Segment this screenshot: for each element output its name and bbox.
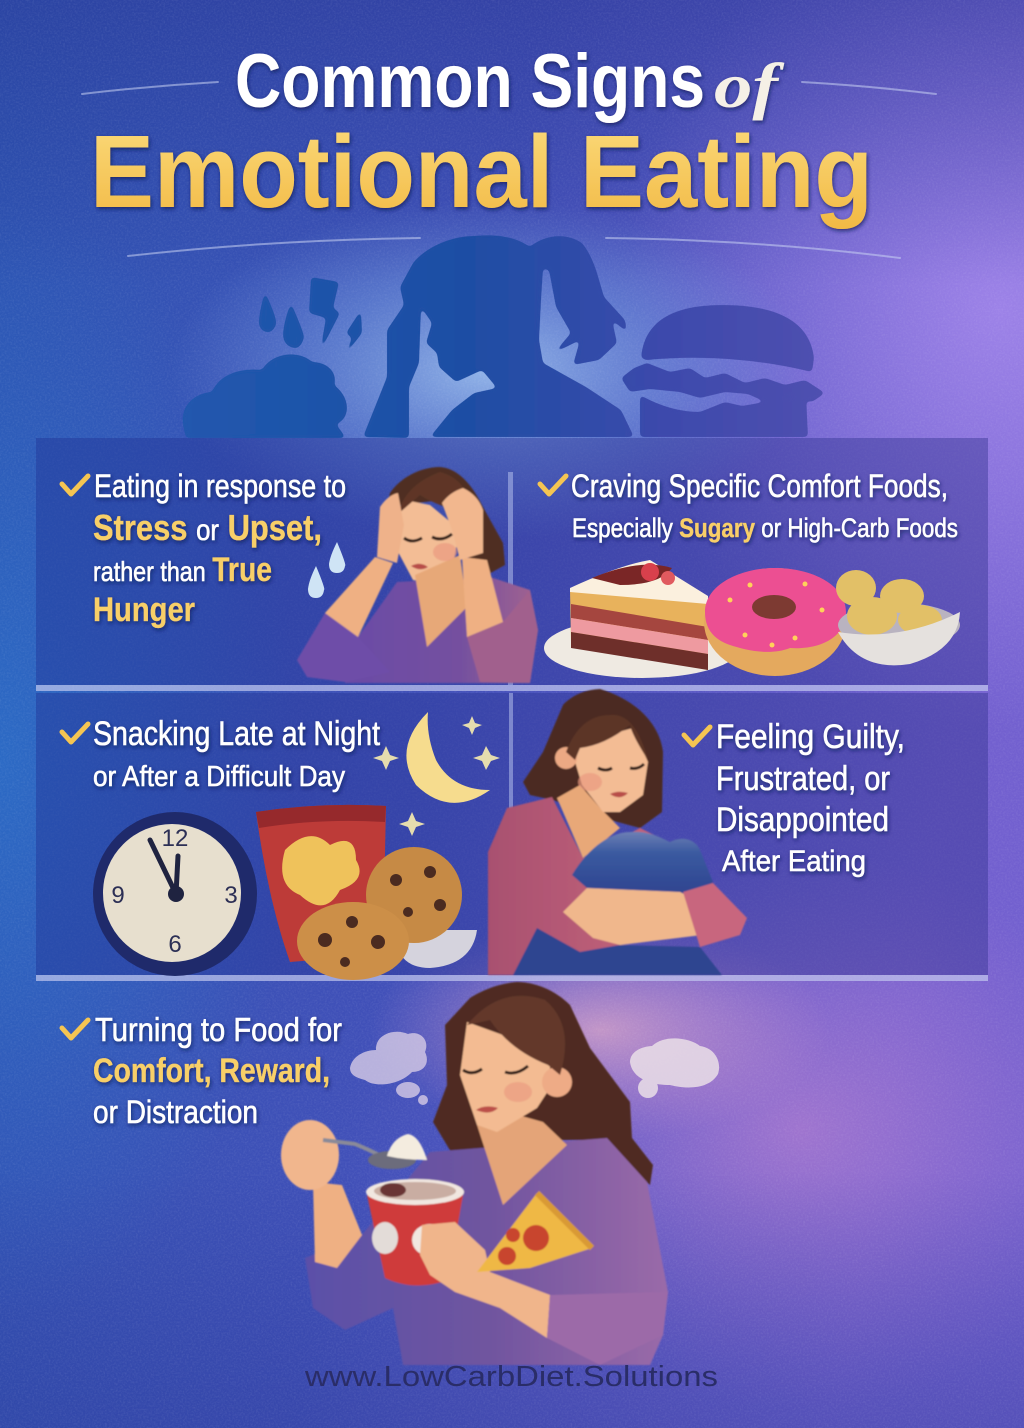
text block: Disappointed	[716, 801, 889, 839]
panel: craving comfort foods	[540, 468, 960, 678]
illustration: chips bag	[256, 805, 386, 962]
icon: drops and lightning	[259, 277, 362, 358]
text block: After Eating	[722, 845, 866, 878]
text block: Turning to Food for	[95, 1011, 342, 1048]
icon: pizza slice	[477, 1193, 592, 1272]
silhouette: woman with ponytail	[363, 235, 634, 438]
icon: clock: 9	[111, 882, 125, 909]
text block: rather than True	[93, 551, 272, 589]
sleeve	[547, 1292, 668, 1365]
illustration: cookies and bowl	[297, 847, 477, 980]
check mark	[62, 1020, 88, 1038]
panel: turning to food	[62, 982, 719, 1365]
text block	[93, 468, 346, 629]
icon: clock	[93, 812, 257, 976]
check mark	[62, 476, 88, 494]
text block	[571, 468, 958, 543]
text block: Feeling Guilty,	[716, 718, 905, 756]
text block	[93, 1011, 342, 1130]
icon: thought clouds	[350, 1032, 719, 1105]
panel: feeling guilty	[488, 689, 905, 975]
text block: Especially Sugary or High-Carb Foods	[572, 513, 958, 543]
illustration: woman eating ice cream and pizza	[281, 982, 668, 1365]
icon: crescent moon and stars	[373, 712, 500, 836]
text block: Comfort, Reward,	[93, 1052, 330, 1090]
icon: clock: 6	[168, 931, 182, 958]
panel: eating in response to stress	[62, 467, 538, 683]
illustration: hand and forearm	[420, 1222, 550, 1338]
text block	[716, 718, 905, 878]
footer website: www.LowCarbDiet.Solutions	[304, 1361, 718, 1393]
text block: Craving Specific Comfort Foods,	[571, 468, 948, 504]
illustration: woman hugging knees	[488, 689, 747, 975]
text block: Hunger	[93, 591, 195, 629]
icon: tear drops	[308, 542, 345, 598]
title: of	[714, 50, 785, 121]
illustration: bowl of potatoes	[836, 570, 960, 665]
illustration: stressed woman	[297, 467, 538, 683]
text block: Frustrated, or	[716, 760, 890, 798]
check mark	[540, 476, 566, 494]
panels backdrop	[36, 438, 988, 981]
check mark	[684, 727, 710, 745]
icon: clock: 12	[162, 825, 188, 852]
title: Emotional Eating	[90, 114, 873, 229]
title: Common Signs	[235, 39, 705, 124]
panel: snacking late at night	[62, 712, 500, 980]
illustration: donut	[704, 568, 846, 676]
text block: Snacking Late at Night	[93, 715, 380, 753]
icon: ice cream cup	[366, 1179, 464, 1286]
text block: or Distraction	[93, 1094, 258, 1130]
title	[90, 39, 873, 229]
icon: storm cloud	[183, 354, 347, 438]
check mark	[62, 724, 88, 742]
icon: clock: 3	[224, 882, 238, 909]
icon: burger	[621, 305, 825, 437]
text block: Stress or Upset,	[93, 507, 322, 548]
text block	[93, 715, 380, 793]
decorative title lines	[82, 82, 936, 258]
icon: spoon and hand	[281, 1120, 427, 1268]
hero silhouette: woman, storm and burger	[183, 235, 825, 438]
text block: or After a Difficult Day	[93, 761, 345, 793]
text block: Eating in response to	[94, 468, 346, 504]
illustration: cake slice	[544, 560, 740, 678]
